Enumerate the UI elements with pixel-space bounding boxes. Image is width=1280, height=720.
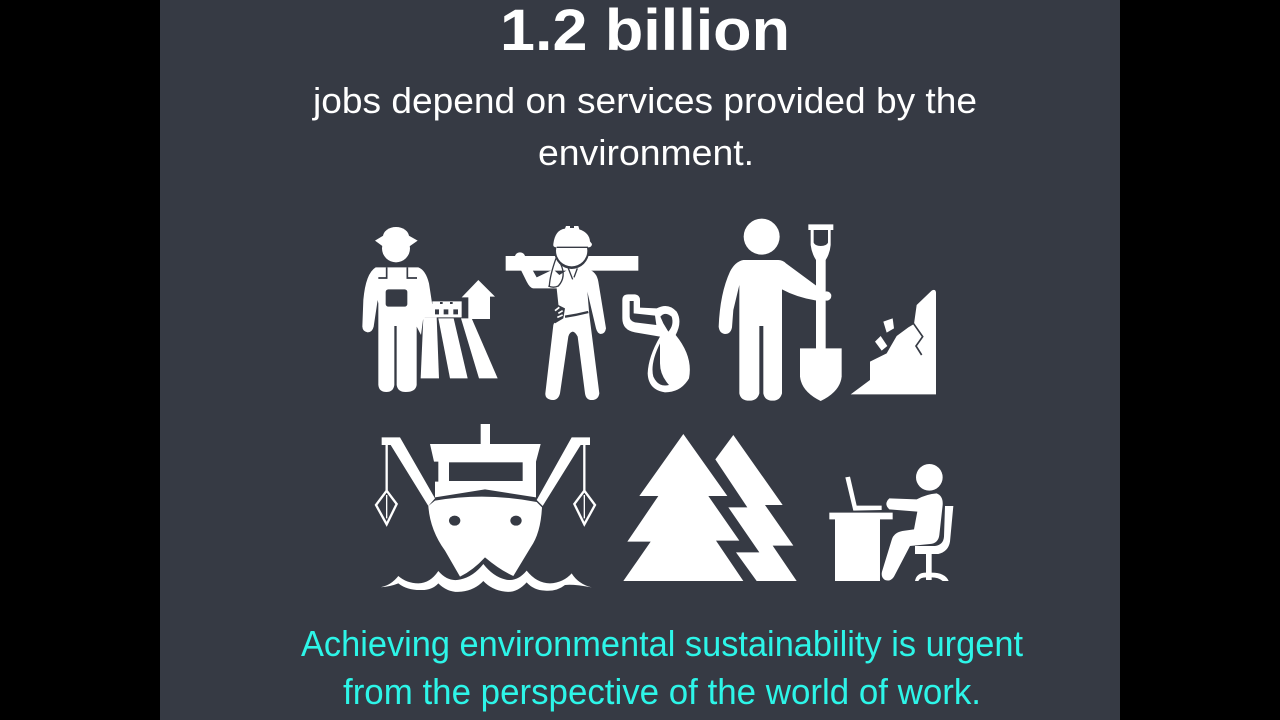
icon: miner with shovel and rock	[719, 219, 936, 401]
conclusion text	[301, 623, 1023, 712]
icon: fishing trawler on waves	[376, 424, 595, 592]
icon: farmer with field	[362, 227, 498, 392]
icon: construction worker with beam	[506, 226, 638, 400]
subtitle text: jobs depend on services provided by the	[312, 80, 977, 121]
icon: rope bag	[622, 294, 690, 392]
conclusion text: from the perspective of the world of work.	[343, 671, 981, 712]
subtitle text	[312, 80, 977, 173]
conclusion text: Achieving environmental sustainability is urgent	[301, 623, 1023, 664]
subtitle text: environment.	[538, 132, 754, 173]
icon: office worker at desk	[829, 464, 953, 581]
icon: pine trees	[623, 434, 797, 581]
